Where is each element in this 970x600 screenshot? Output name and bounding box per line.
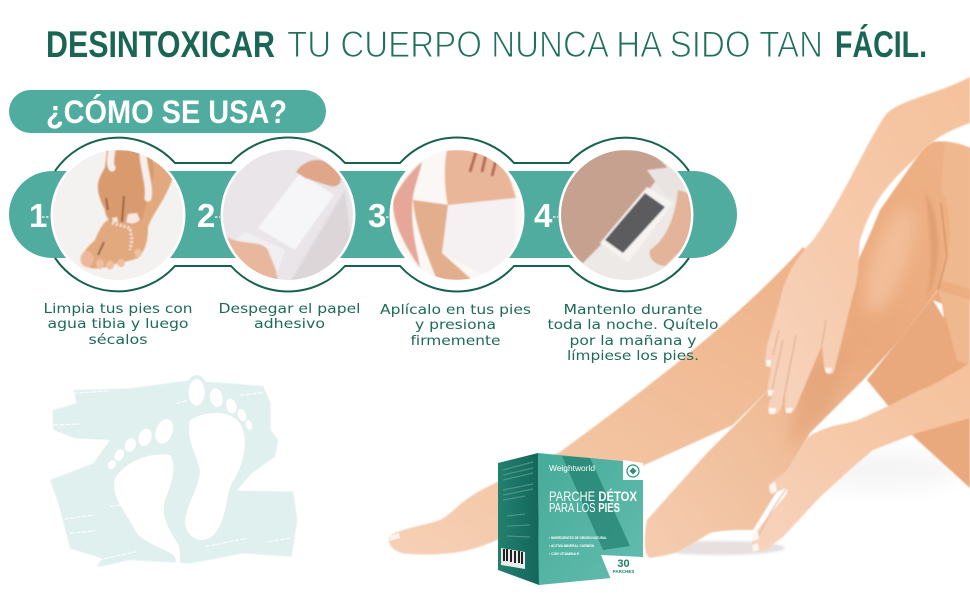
caption step 3: firmemente xyxy=(410,333,500,349)
box side panel xyxy=(498,453,539,585)
step numbers: 3 xyxy=(368,197,386,234)
product box xyxy=(498,453,643,585)
caption step 4: límpiese los pies. xyxy=(567,348,699,364)
step numbers: 4 xyxy=(534,197,553,234)
number connector dashes xyxy=(42,216,558,218)
box text: • INGREDIENTES DE ORIGEN NATURAL xyxy=(549,536,608,540)
near leg and foot xyxy=(645,140,970,558)
caption step 3: Aplícalo en tus pies xyxy=(380,302,531,318)
caption step 1: agua tibia y luego xyxy=(48,316,188,332)
step numbers: 1 xyxy=(29,197,47,234)
caption step 3 xyxy=(380,302,531,349)
box dark diagonal xyxy=(562,456,630,550)
box text: • ACTIVA MINERAL CARBÓN xyxy=(549,543,594,548)
caption step 2: adhesivo xyxy=(254,316,325,332)
box text: Weightworld xyxy=(549,463,595,473)
title: FÁCIL. xyxy=(835,24,927,65)
caption step 3: y presiona xyxy=(415,317,496,333)
step 3 photo: applying the patch to the sole xyxy=(390,148,526,282)
icon: footprints on brush stroke xyxy=(50,375,297,582)
caption step 1: sécalos xyxy=(88,332,148,348)
caption step 2: Despegar el papel xyxy=(218,301,360,317)
box text: PARCHE DÉTOX xyxy=(549,488,638,504)
upper arm and hand on the shin xyxy=(765,77,970,414)
lower arm and hand on the ankle xyxy=(751,363,970,552)
box text: PARA LOS PIES xyxy=(549,501,620,515)
box text xyxy=(549,463,638,574)
box side details xyxy=(501,462,533,569)
caption step 1 xyxy=(44,301,192,348)
box text: • CON VITAMINA E xyxy=(549,552,580,556)
floor shadow xyxy=(655,452,960,555)
box text: PARCHES xyxy=(613,569,634,574)
illustration: seated legs with hands xyxy=(389,77,970,558)
title: DESINTOXICAR xyxy=(46,24,275,65)
far leg and foot xyxy=(389,247,860,554)
steps band xyxy=(9,138,737,291)
caption step 1: Limpia tus pies con xyxy=(44,301,192,317)
far foot toenail xyxy=(390,533,400,541)
heading pill: ¿CÓMO SE USA? xyxy=(46,94,287,130)
title xyxy=(46,24,927,65)
caption step 4: toda la noche. Quítelo xyxy=(548,317,718,333)
box text: 30 xyxy=(617,558,630,570)
box front panel xyxy=(538,453,643,585)
title: TU CUERPO NUNCA HA SIDO TAN xyxy=(287,24,823,65)
step 2 photo: peeling the adhesive patch xyxy=(220,148,356,282)
step 4 photo: patch worn overnight xyxy=(558,148,695,282)
step numbers: 2 xyxy=(197,197,215,234)
caption step 4: por la mañana y xyxy=(570,333,696,349)
box corner label xyxy=(601,555,643,582)
box badge xyxy=(623,460,643,480)
caption step 4 xyxy=(548,302,718,364)
caption step 4: Mantenlo durante xyxy=(564,302,702,318)
caption step 2 xyxy=(218,301,360,332)
step numbers xyxy=(29,197,553,234)
step 1 photo: washing feet xyxy=(50,148,186,282)
rear thigh and calf xyxy=(867,142,970,488)
